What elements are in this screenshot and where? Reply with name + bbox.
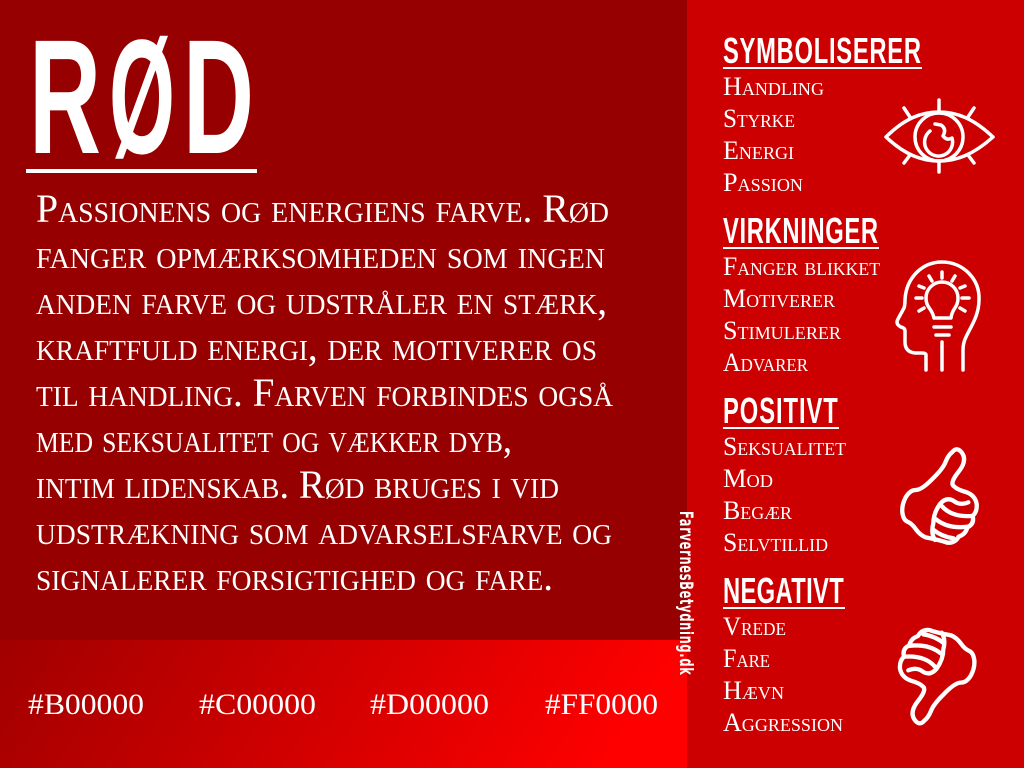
- vertical website credit: FarvernesBetydning.dk: [675, 511, 698, 675]
- section: negativt: NEGATIVT: [723, 571, 844, 611]
- section: positivt: Mod: [723, 464, 773, 493]
- section: positivt: Seksualitet: [723, 432, 846, 461]
- section: negativt: Aggression: [723, 708, 843, 737]
- panel: colour code gradient band: [0, 640, 687, 768]
- panel: main description background: [0, 0, 687, 640]
- colour codes: #B00000: [28, 688, 144, 721]
- section: virkninger: Fanger blikket: [723, 252, 880, 281]
- text block: description of the colour red: signalerer forsigtighed og fare.: [36, 554, 553, 599]
- title: [26, 5, 257, 188]
- colour codes: #FF0000: [545, 688, 658, 721]
- title: D: [183, 5, 254, 188]
- section: virkninger: Advarer: [723, 348, 808, 377]
- section: negativt: Fare: [723, 644, 770, 673]
- section: virkninger: Motiverer: [723, 284, 835, 313]
- colour codes: [28, 688, 658, 721]
- section: symboliserer: Energi: [723, 136, 794, 165]
- section: negativt: Vrede: [723, 612, 786, 641]
- section: positivt: Begær: [723, 496, 792, 525]
- section: symboliserer: SYMBOLISERER: [723, 31, 921, 71]
- section: virkninger: Stimulerer: [723, 316, 841, 345]
- icon: thumbs down: [900, 630, 974, 723]
- colour codes: #D00000: [370, 688, 489, 721]
- section: symboliserer: Styrke: [723, 104, 795, 133]
- text block: description of the colour red: udstrækning som advarselsfarve og: [36, 508, 612, 553]
- title: Ø: [109, 5, 175, 188]
- text block: description of the colour red: [36, 186, 614, 599]
- text block: description of the colour red: til handling. Farven forbindes også: [36, 370, 614, 415]
- text block: description of the colour red: intim lidenskab. Rød bruges i vid: [36, 462, 559, 507]
- section: positivt: [723, 391, 846, 557]
- section: symboliserer: Handling: [723, 72, 824, 101]
- section: virkninger: [723, 211, 880, 377]
- text block: description of the colour red: Passionens og energiens farve. Rød: [36, 186, 609, 231]
- section: symboliserer: Passion: [723, 168, 803, 197]
- section: negativt: [723, 571, 845, 737]
- text block: description of the colour red: med seksualitet og vækker dyb,: [36, 416, 512, 461]
- text block: description of the colour red: kraftfuld energi, der motiverer os: [36, 324, 597, 369]
- section: negativt: Hævn: [723, 676, 784, 705]
- section: positivt: Selvtillid: [723, 528, 828, 557]
- title: R: [29, 5, 101, 188]
- icon: eye: [886, 100, 993, 172]
- section: virkninger: VIRKNINGER: [723, 211, 878, 251]
- section: symboliserer: [723, 31, 922, 197]
- icon: head with light bulb: [897, 262, 979, 370]
- text block: description of the colour red: fanger opmærksomheden som ingen: [36, 232, 605, 277]
- colour codes: #C00000: [199, 688, 316, 721]
- text block: description of the colour red: anden farve og udstråler en stærk,: [36, 278, 607, 323]
- section: positivt: POSITIVT: [723, 391, 838, 431]
- panel: sidebar background: [687, 0, 1024, 768]
- icon: thumbs up: [902, 449, 977, 543]
